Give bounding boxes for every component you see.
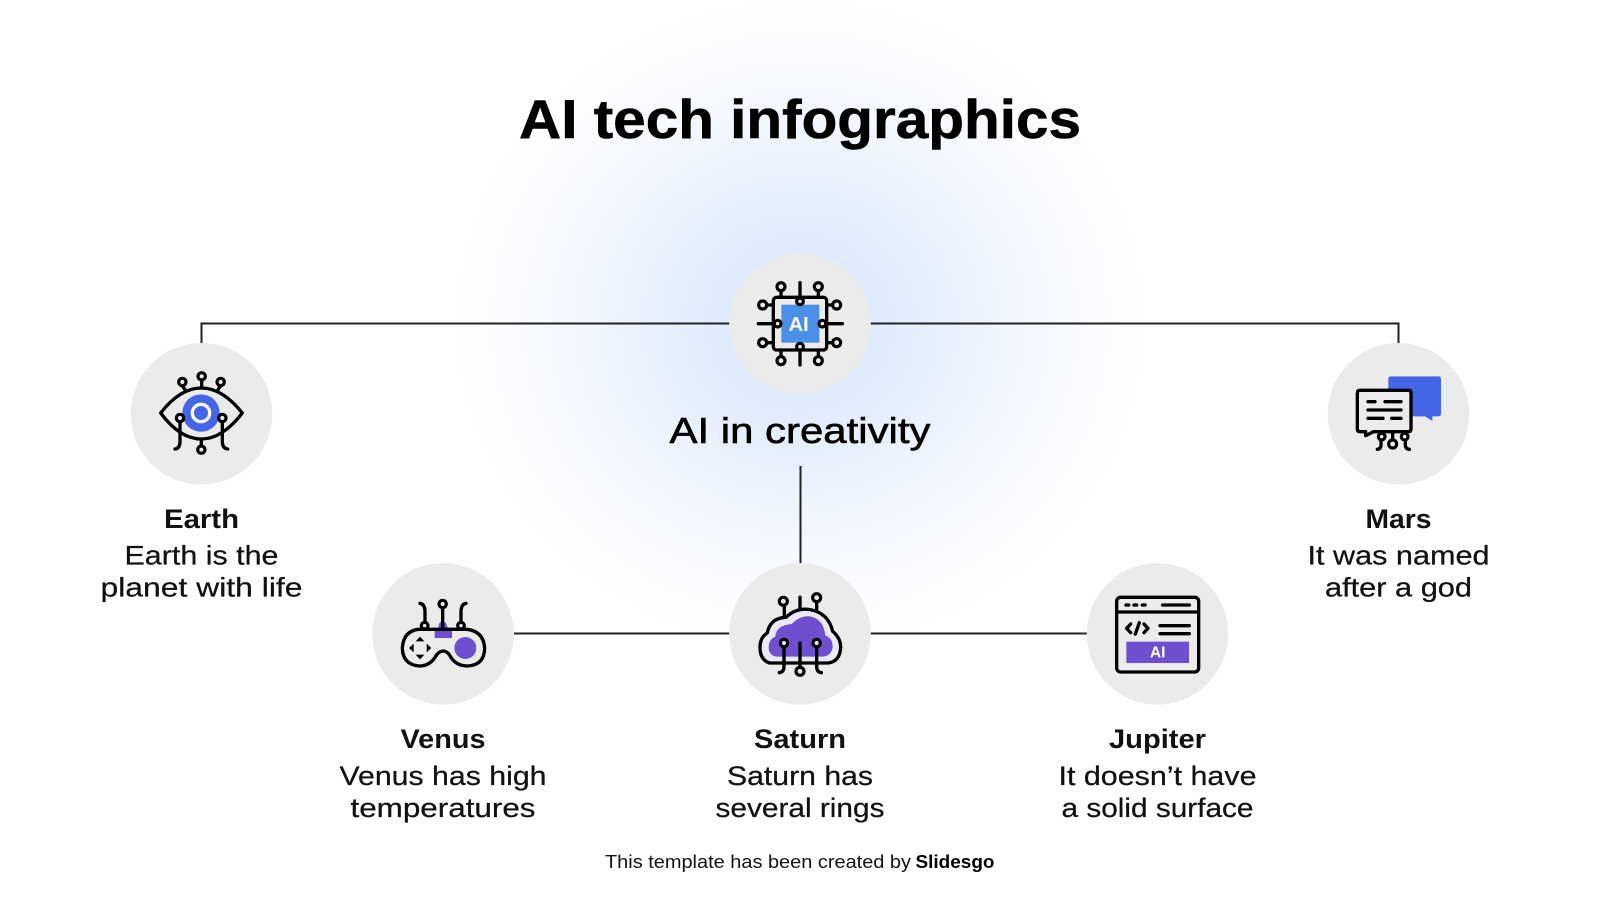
- text: Jupiter: [1058, 724, 1256, 823]
- text: Earth: [100, 504, 302, 602]
- icon: cloud: [760, 594, 841, 675]
- connector: Venus to Saturn: [514, 632, 730, 634]
- text: Mars: Mars: [1366, 504, 1432, 534]
- node: Mars: [1308, 343, 1490, 602]
- text: Earth: Earth is the: [124, 540, 278, 570]
- central label: AI in creativity: [670, 410, 930, 451]
- text: Mars: after a god: [1325, 572, 1472, 602]
- connector: Saturn to Jupiter: [870, 632, 1087, 634]
- title: AI tech infographics: [519, 88, 1081, 150]
- text: Saturn: several rings: [716, 793, 884, 823]
- central node: AI chip: [729, 253, 871, 395]
- text: Saturn: Saturn: [754, 724, 846, 754]
- text: Venus: temperatures: [350, 793, 536, 823]
- icon: game controller: [402, 600, 485, 666]
- node: Earth: [100, 343, 302, 602]
- icon: AI chip: AI: [789, 314, 809, 336]
- connector: centre to Earth: [202, 324, 730, 344]
- connector: centre to Saturn: [800, 466, 802, 564]
- connector: centre to Mars: [870, 324, 1398, 344]
- text: Mars: It was named: [1308, 540, 1490, 570]
- text: Saturn: Saturn has: [727, 761, 873, 791]
- node: Saturn: [716, 563, 884, 823]
- text: Venus: Venus has high: [340, 761, 546, 791]
- node: Jupiter: [1058, 563, 1256, 823]
- text: Jupiter: It doesn’t have: [1058, 761, 1256, 791]
- icon: code window: AI: [1150, 645, 1165, 662]
- text: Venus: Venus: [400, 724, 486, 754]
- text: Jupiter: a solid surface: [1062, 793, 1254, 823]
- icon: code window: [1117, 597, 1199, 672]
- footer credit: This template has been created by: [605, 851, 912, 872]
- text: Earth: Earth: [164, 504, 239, 534]
- text: Jupiter: Jupiter: [1109, 724, 1207, 754]
- text: Earth: planet with life: [100, 572, 302, 602]
- text: Mars: [1308, 504, 1490, 602]
- text: Venus: [340, 724, 546, 823]
- icon: AI chip: [758, 283, 842, 365]
- icon: chat bubbles: [1357, 376, 1441, 449]
- footer credit: Slidesgo: [916, 851, 994, 872]
- node: Venus: [340, 563, 546, 823]
- icon: eye: [161, 373, 242, 453]
- text: Saturn: [716, 724, 884, 823]
